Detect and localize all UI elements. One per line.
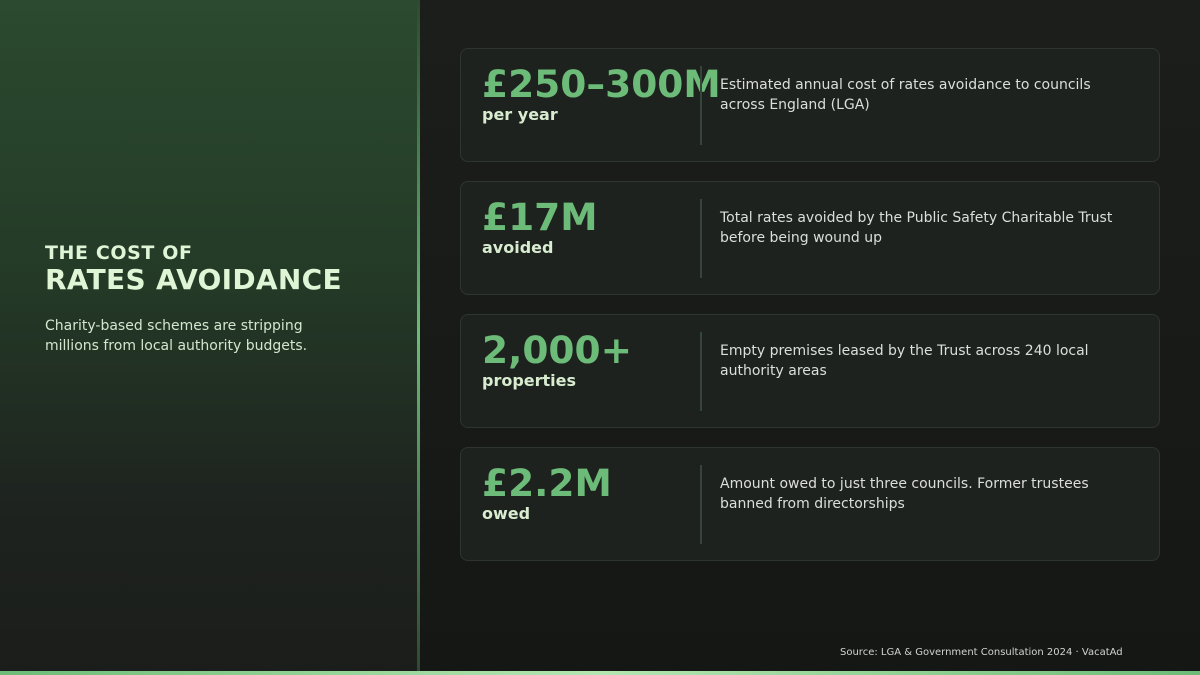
subtitle: millions from local authority budgets.: [45, 338, 307, 354]
card: 2000+: properties: [482, 371, 576, 390]
card: 17M: [460, 181, 1160, 295]
card: 17M: avoided: [482, 238, 553, 257]
source: Source: LGA & Government Consultation 2024 · VacatAd: [840, 647, 1123, 658]
title: [45, 242, 342, 296]
card: 250-300M: £250–300M: [482, 62, 721, 106]
left panel: [0, 0, 420, 675]
card: 17M: Total rates avoided by the Public Safety Charitable Trust before being wound up: [720, 210, 1112, 246]
card: 2.2M: [460, 447, 1160, 561]
bottom bar: [0, 671, 1200, 675]
card: 17M: £17M: [482, 195, 598, 239]
card: 2.2M: Amount owed to just three councils. Former trustees banned from directorships: [720, 476, 1089, 512]
card: 2000+: [460, 314, 1160, 428]
card: 2000+: Empty premises leased by the Trust across 240 local authority areas: [720, 343, 1089, 379]
title: RATES AVOIDANCE: [45, 263, 342, 296]
card: 250-300M: Estimated annual cost of rates avoidance to councils across England (LGA): [720, 77, 1091, 113]
card: 2.2M: £2.2M: [482, 461, 612, 505]
card: 250-300M: [460, 48, 1160, 162]
card: 250-300M: per year: [482, 105, 558, 124]
title: THE COST OF: [45, 242, 193, 264]
subtitle: [45, 318, 307, 354]
card: 2.2M: owed: [482, 504, 530, 523]
card: 2000+: 2,000+: [482, 328, 632, 372]
subtitle: Charity-based schemes are stripping: [45, 318, 303, 334]
